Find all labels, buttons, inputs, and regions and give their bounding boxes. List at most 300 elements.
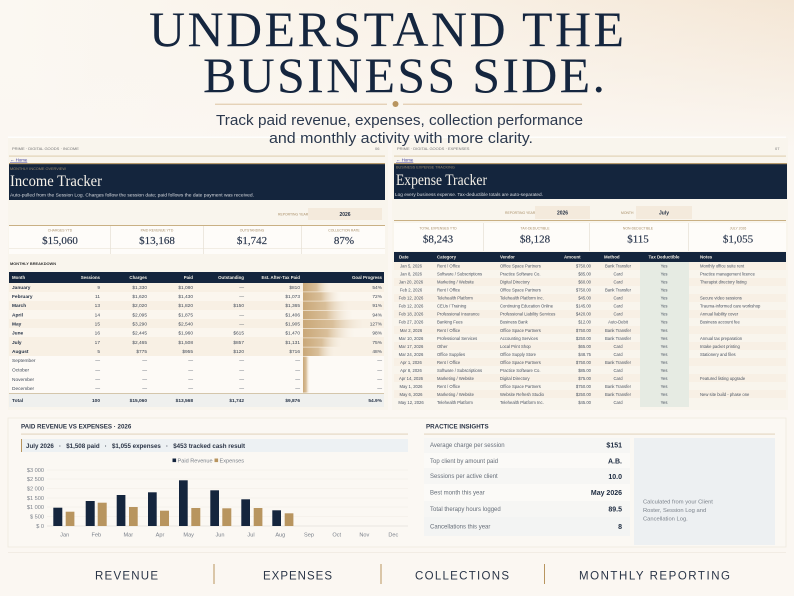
monthly breakdown table: 98%: [372, 331, 383, 337]
income page header: [9, 146, 385, 162]
monthly breakdown table: November: [12, 377, 35, 383]
monthly breakdown table: $810: [289, 285, 300, 291]
monthly breakdown table: $3,290: [132, 322, 147, 328]
expense log table: Therapist directory listing: [700, 280, 747, 284]
expense log table: $45.00: [578, 400, 592, 405]
expense log table: Yes: [661, 376, 667, 381]
expense log table: Rent / Office: [437, 384, 461, 389]
monthly breakdown table: $615: [233, 331, 244, 337]
chart legend: Paid Revenue: [178, 458, 213, 464]
insights rows: Total therapy hours logged: [430, 507, 501, 513]
expense log table: Professional Services: [437, 336, 477, 341]
expense log table: Feb 12, 2026: [399, 304, 424, 309]
expense log table: Business Bank: [500, 320, 529, 325]
bar chart: $2 500: [27, 477, 44, 483]
expense log table: Yes: [661, 344, 667, 349]
expense log table: Rent / Office: [437, 360, 461, 365]
expense log table: Annual liability cover: [700, 312, 739, 317]
expense log table: May 6, 2026: [399, 392, 423, 397]
expense log table: Tax Deductible: [649, 254, 680, 260]
insights rows: May 2026: [591, 490, 622, 497]
expense log table: Intake packet printing: [700, 344, 740, 349]
expense log table: Jan 8, 2026: [400, 272, 423, 276]
expense log table: Featured listing upgrade: [700, 376, 746, 381]
expense log table: Yes: [661, 264, 667, 268]
reporting year selector: 2026: [339, 212, 351, 218]
monthly breakdown table: $2,445: [132, 331, 147, 337]
expense log table: $48.75: [578, 352, 592, 357]
expense kpi cards: $1,055: [723, 234, 754, 246]
expense log table: Office Space Partners: [500, 384, 541, 389]
monthly breakdown table: $1,131: [285, 340, 300, 346]
expense log table: Jan 5, 2026: [400, 264, 423, 268]
expense banner: [394, 163, 787, 199]
reporting year and month selectors: July: [659, 210, 669, 216]
expense log table: Yes: [661, 304, 667, 309]
expense log table: Marketing / Website: [437, 280, 475, 284]
monthly breakdown table: August: [12, 349, 29, 355]
income kpi cards: $13,168: [139, 235, 175, 247]
expense log table: Yes: [661, 384, 667, 389]
expense log table: Mar 10, 2026: [399, 336, 424, 341]
expense log table: Feb 27, 2026: [399, 320, 424, 325]
monthly breakdown table: 17: [95, 340, 100, 346]
expense log table: Amount: [564, 254, 581, 260]
expense log table: Vendor: [500, 254, 515, 260]
monthly breakdown table: $1,820: [178, 303, 193, 309]
expense kpi cards: JULY 2026: [730, 226, 746, 230]
expense page header: ← Home: [396, 158, 414, 162]
subtitle: and monthly activity with more clarity.: [269, 130, 533, 147]
bar chart: Feb: [91, 532, 101, 538]
monthly breakdown table: —: [239, 295, 244, 300]
monthly breakdown table: —: [377, 359, 382, 364]
insights note box: Roster, Session Log and: [643, 508, 706, 514]
insights note box: Cancellation Log.: [643, 516, 688, 522]
monthly breakdown table: 5: [97, 349, 100, 355]
expense log table: Telehealth Platform Inc.: [500, 296, 544, 301]
income kpi cards: PAID REVENUE YTD: [141, 228, 174, 232]
monthly breakdown table: December: [12, 386, 35, 392]
expense log table: CEUs / Training: [437, 304, 467, 309]
expense log table: Bank Transfer: [605, 328, 632, 333]
expense log table: Office Space Partners: [500, 264, 541, 268]
monthly breakdown table: July: [12, 340, 22, 346]
title divider with dot: [215, 101, 582, 107]
insights rows: 89.5: [608, 506, 622, 514]
expense log table: Jan 20, 2026: [399, 280, 424, 284]
insights note box: [634, 438, 775, 545]
expense log table: Office Supply Store: [500, 352, 537, 357]
monthly breakdown table: $1,430: [178, 294, 193, 300]
monthly breakdown table: —: [95, 378, 100, 383]
monthly breakdown table: 75%: [372, 340, 383, 346]
expense log table: $750.00: [576, 384, 592, 389]
expense log table: Mar 17, 2026: [399, 344, 424, 349]
insights rows: 8: [618, 524, 622, 531]
july summary strip: [21, 439, 408, 452]
monthly breakdown table: —: [95, 368, 100, 374]
monthly breakdown table: —: [239, 322, 244, 328]
subtitle: Track paid revenue, expenses, collection performance: [216, 112, 583, 129]
monthly breakdown table: September: [12, 358, 36, 364]
income kpi cards: OUTSTANDING: [240, 228, 265, 232]
income kpi cards: CHARGES YTD: [48, 228, 73, 232]
expense log table: [394, 252, 786, 407]
title: UNDERSTAND THE: [149, 1, 624, 57]
monthly breakdown table: $1,073: [285, 294, 300, 300]
expense log table: Mar 24, 2026: [399, 352, 424, 357]
expense log table: $45.00: [578, 296, 592, 301]
expense log table: Yes: [661, 392, 667, 397]
insights heading: PRACTICE INSIGHTS: [426, 424, 489, 430]
monthly breakdown table: —: [95, 387, 100, 392]
expense log table: Yes: [661, 328, 667, 333]
monthly breakdown table: —: [295, 359, 300, 364]
expense log table: Bank Transfer: [605, 264, 632, 268]
monthly breakdown table: $2,020: [132, 303, 147, 309]
expense log table: Card: [613, 344, 623, 349]
monthly breakdown table: 16: [95, 331, 100, 337]
expense log table: Local Print Shop: [500, 344, 531, 349]
monthly breakdown table: 127%: [370, 322, 383, 328]
monthly breakdown table: —: [142, 368, 147, 374]
expense log table: Other: [437, 344, 448, 349]
expense log table: Rent / Office: [437, 328, 461, 333]
monthly breakdown table: June: [12, 331, 24, 337]
expense log table: $75.00: [578, 376, 592, 381]
monthly breakdown table: Month: [12, 275, 25, 280]
monthly breakdown table: 91%: [372, 303, 383, 309]
income kpi cards: 87%: [334, 235, 354, 247]
insights rows: 10.0: [608, 474, 622, 481]
monthly breakdown table: $1,080: [178, 285, 193, 291]
income banner: Auto-pulled from the Session Log. Charges follow the session date; paid follows the date payment was received.: [10, 192, 254, 198]
bar chart: Oct: [332, 532, 341, 538]
expense log table: Bank Transfer: [605, 336, 632, 341]
expense kpi cards: $8,128: [520, 234, 551, 246]
monthly breakdown table: $15,060: [130, 398, 147, 404]
monthly breakdown table: Paid: [184, 275, 193, 280]
monthly breakdown heading: MONTHLY BREAKDOWN: [10, 261, 56, 266]
insights rows: A.B.: [608, 458, 622, 466]
expense page header: [394, 146, 786, 162]
expense log table: Office Space Partners: [500, 288, 541, 293]
expense page header: PRIME · DIGITAL GOODS · EXPENSES: [397, 146, 470, 151]
bar chart: Sep: [304, 532, 314, 538]
monthly breakdown table: $857: [233, 340, 244, 346]
monthly breakdown table: $1,742: [229, 398, 244, 404]
footer labels: COLLECTIONS: [415, 570, 509, 582]
expense banner: BUSINESS EXPENSE TRACKING: [396, 166, 455, 170]
expense kpi cards: [394, 220, 786, 251]
monthly breakdown table: $2,540: [178, 322, 193, 328]
expense log table: Office Space Partners: [500, 360, 541, 365]
monthly breakdown table: $1,470: [285, 331, 300, 337]
title: [149, 1, 624, 103]
insights note box: Calculated from your Client: [643, 500, 713, 506]
monthly breakdown table: —: [295, 378, 300, 383]
expense log table: $250.00: [576, 336, 592, 341]
expense log table: Secure video sessions: [700, 296, 742, 301]
bar chart: $1 000: [27, 505, 44, 511]
expense log table: $145.00: [576, 304, 592, 309]
footer labels: EXPENSES: [263, 570, 332, 582]
expense log table: Mar 2, 2026: [400, 328, 423, 333]
expense log table: Date: [399, 254, 409, 260]
monthly breakdown table: 54%: [372, 285, 383, 291]
expense log table: Auto-Debit: [608, 320, 629, 325]
monthly breakdown table: Goal Progress: [352, 275, 383, 280]
bar chart: $ 500: [30, 514, 44, 520]
footer labels: REVENUE: [95, 570, 158, 582]
expense log table: May 1, 2026: [399, 384, 423, 389]
monthly breakdown table: —: [188, 378, 193, 383]
reporting year and month selectors: [505, 206, 692, 219]
monthly breakdown table: —: [188, 387, 193, 392]
expense log table: Software / Subscriptions: [437, 272, 482, 276]
expense log table: Feb 2, 2026: [400, 288, 423, 293]
monthly breakdown table: —: [239, 359, 244, 364]
expense log table: Professional Liability Services: [500, 312, 555, 317]
reporting year and month selectors: MONTH: [621, 211, 634, 215]
expense log table: Yes: [661, 360, 667, 365]
monthly breakdown table: $1,365: [285, 303, 300, 309]
monthly breakdown table: $1,875: [178, 312, 193, 318]
reporting year selector: [278, 208, 382, 220]
income kpi cards: $15,060: [42, 235, 78, 247]
monthly breakdown table: $120: [233, 349, 244, 355]
monthly breakdown table: —: [377, 368, 382, 374]
monthly breakdown table: —: [239, 286, 244, 291]
expense log table: Digital Directory: [500, 280, 530, 284]
expense log table: Notes: [700, 254, 713, 260]
expense log table: Feb 18, 2026: [399, 312, 424, 317]
expense kpi cards: $8,243: [423, 234, 454, 246]
expense log table: Feb 12, 2026: [399, 296, 424, 301]
monthly breakdown table: —: [188, 368, 193, 374]
bar chart: $1 500: [27, 496, 44, 502]
monthly breakdown table: $1,960: [178, 331, 193, 337]
expense log table: Rent / Office: [437, 264, 461, 268]
expense banner: Expense Tracker: [396, 172, 488, 189]
monthly breakdown table: —: [295, 387, 300, 392]
expense log table: Office Supplies: [437, 352, 465, 357]
subtitle: [216, 112, 583, 147]
panel: expense tracker: [392, 138, 788, 410]
expense log table: Card: [613, 304, 623, 309]
expense log table: Card: [613, 400, 623, 405]
panel: paid revenue vs expenses: [21, 424, 408, 538]
expense log table: Business account fee: [700, 320, 740, 325]
monthly breakdown table: 48%: [372, 349, 383, 355]
expense log table: Bank Transfer: [605, 392, 632, 397]
expense log table: $12.00: [578, 320, 592, 325]
expense log table: Professional Insurance: [437, 312, 480, 317]
expense log table: Card: [613, 280, 623, 284]
bar chart: Nov: [359, 532, 369, 538]
monthly breakdown table: 9: [97, 285, 100, 291]
monthly breakdown table: —: [239, 387, 244, 392]
expense log table: Telehealth Platform: [437, 400, 473, 405]
insights rows: Cancellations this year: [430, 524, 490, 530]
monthly breakdown table: $955: [182, 349, 193, 355]
expense log table: Category: [437, 254, 457, 260]
expense log table: Yes: [661, 288, 667, 293]
expense log table: Practice management licence: [700, 272, 756, 276]
bar chart: May: [183, 532, 194, 538]
expense log table: $65.00: [578, 344, 592, 349]
monthly breakdown table: $1,508: [178, 340, 193, 346]
panel: income tracker: [8, 138, 388, 410]
monthly breakdown table: Charges: [129, 275, 148, 280]
monthly breakdown table: Outstanding: [218, 275, 244, 280]
expense log table: Bank Transfer: [605, 384, 632, 389]
expense log table: Method: [604, 254, 620, 260]
reporting year selector: REPORTING YEAR: [278, 212, 309, 216]
expense log table: Yes: [661, 296, 667, 301]
expense log table: Apr 14, 2026: [399, 376, 424, 381]
income kpi cards: $1,742: [237, 235, 267, 247]
income banner: MONTHLY INCOME OVERVIEW: [10, 167, 66, 171]
expense log table: $420.00: [576, 312, 592, 317]
expense log table: Office Space Partners: [500, 328, 541, 333]
bar chart: Jul: [247, 532, 255, 538]
monthly breakdown table: $2,095: [132, 312, 147, 318]
monthly breakdown table: $2,465: [132, 340, 147, 346]
expense log table: Practice Software Co.: [500, 368, 540, 373]
expense log table: Digital Directory: [500, 376, 530, 381]
expense log table: Bank Transfer: [605, 360, 632, 365]
monthly breakdown table: —: [377, 387, 382, 392]
monthly breakdown table: —: [377, 378, 382, 383]
monthly breakdown table: January: [12, 285, 31, 291]
monthly breakdown table: [9, 272, 384, 407]
expense log table: Card: [613, 296, 623, 301]
income page header: ← Home: [10, 158, 28, 162]
monthly breakdown table: $1,330: [132, 285, 147, 291]
expense log table: Apr 8, 2026: [400, 368, 422, 373]
chart legend: Expenses: [220, 458, 244, 464]
insights rows: Top client by amount paid: [430, 459, 498, 465]
expense log table: Yes: [661, 272, 667, 276]
expense log table: Banking Fees: [437, 320, 463, 325]
expense banner: Log every business expense. Tax-deductible totals are auto-separated.: [395, 192, 543, 197]
monthly breakdown table: October: [12, 368, 29, 374]
monthly breakdown table: Est. After-Tax Paid: [261, 275, 300, 280]
bar chart: Mar: [123, 532, 133, 538]
bar chart: $3 000: [27, 468, 44, 474]
expense log table: Continuing Education Online: [500, 304, 554, 309]
reporting year and month selectors: REPORTING YEAR: [505, 211, 536, 215]
expense log table: Card: [613, 376, 623, 381]
monthly breakdown table: 11: [95, 294, 100, 300]
chart heading: PAID REVENUE VS EXPENSES · 2026: [21, 424, 132, 430]
monthly breakdown table: $1,620: [132, 294, 147, 300]
monthly breakdown table: —: [239, 368, 244, 374]
insights rows: Sessions per active client: [430, 474, 498, 480]
chart legend: [172, 458, 244, 464]
expense log table: Bank Transfer: [605, 288, 632, 293]
bar chart: Dec: [388, 532, 398, 538]
expense log table: Marketing / Website: [437, 376, 475, 381]
expense log table: Yes: [661, 400, 667, 405]
insights rows: Average charge per session: [430, 443, 505, 449]
insights rows: [424, 438, 630, 536]
bar chart: Jan: [60, 532, 69, 538]
expense log table: Telehealth Platform Inc.: [500, 400, 544, 405]
expense log table: Card: [613, 368, 623, 373]
expense log table: Apr 1, 2026: [400, 360, 422, 365]
expense kpi cards: TOTAL EXPENSES YTD: [419, 226, 457, 230]
monthly breakdown table: 54.9%: [368, 398, 383, 404]
monthly breakdown table: —: [142, 387, 147, 392]
expense log table: Yes: [661, 368, 667, 373]
monthly breakdown table: $1,905: [285, 322, 300, 328]
monthly breakdown table: Sessions: [81, 275, 101, 280]
monthly breakdown table: 14: [95, 312, 100, 318]
expense log table: Yes: [661, 312, 667, 317]
expense log table: Rent / Office: [437, 288, 461, 293]
footer labels: [95, 564, 730, 584]
monthly breakdown table: $13,568: [176, 398, 193, 404]
expense log table: Trauma-informed care workshop: [700, 304, 761, 309]
expense log table: Practice Software Co.: [500, 272, 540, 276]
expense log table: Stationery and files: [700, 352, 736, 357]
income kpi cards: COLLECTION RATE: [328, 228, 360, 232]
expense log table: $250.00: [576, 392, 592, 397]
expense log table: $750.00: [576, 264, 592, 268]
expense log table: $85.00: [578, 368, 592, 373]
expense log table: Marketing / Website: [437, 392, 475, 397]
insights rows: $151: [606, 442, 622, 450]
bar chart: Apr: [156, 532, 164, 538]
expense log table: Annual tax preparation: [700, 336, 743, 341]
expense page header: 07: [775, 146, 780, 151]
monthly breakdown table: $716: [289, 349, 300, 355]
expense log table: New site build - phase one: [700, 392, 750, 397]
expense kpi cards: NON-DEDUCTIBLE: [623, 226, 654, 230]
monthly breakdown table: $9,876: [285, 398, 300, 404]
monthly breakdown table: 13: [95, 303, 100, 309]
monthly breakdown table: Total: [12, 398, 23, 404]
expense log table: Monthly office suite rent: [700, 264, 745, 268]
monthly breakdown table: $1,406: [285, 312, 300, 318]
monthly breakdown table: —: [142, 378, 147, 383]
monthly breakdown table: —: [142, 359, 147, 364]
income page header: 06: [375, 146, 380, 151]
monthly breakdown table: —: [295, 368, 300, 374]
income banner: Income Tracker: [10, 173, 103, 190]
panel: practice insights: [424, 424, 775, 545]
expense log table: Yes: [661, 336, 667, 341]
expense log table: Card: [613, 272, 623, 276]
footer labels: MONTHLY REPORTING: [579, 570, 730, 582]
income page header: PRIME · DIGITAL GOODS · INCOME: [12, 146, 79, 151]
bar chart: $2 000: [27, 486, 44, 492]
expense log table: Yes: [661, 352, 667, 357]
expense log table: Telehealth Platform: [437, 296, 473, 301]
panel: bottom dashboard background: [8, 418, 786, 547]
monthly breakdown table: —: [239, 378, 244, 383]
expense log table: Yes: [661, 320, 667, 325]
reporting year and month selectors: 2026: [557, 210, 568, 216]
expense log table: $750.00: [576, 288, 592, 293]
bar chart: [27, 468, 408, 538]
monthly breakdown table: $150: [233, 303, 244, 309]
expense log table: Accounting Services: [500, 336, 538, 341]
monthly breakdown table: 72%: [372, 294, 383, 300]
